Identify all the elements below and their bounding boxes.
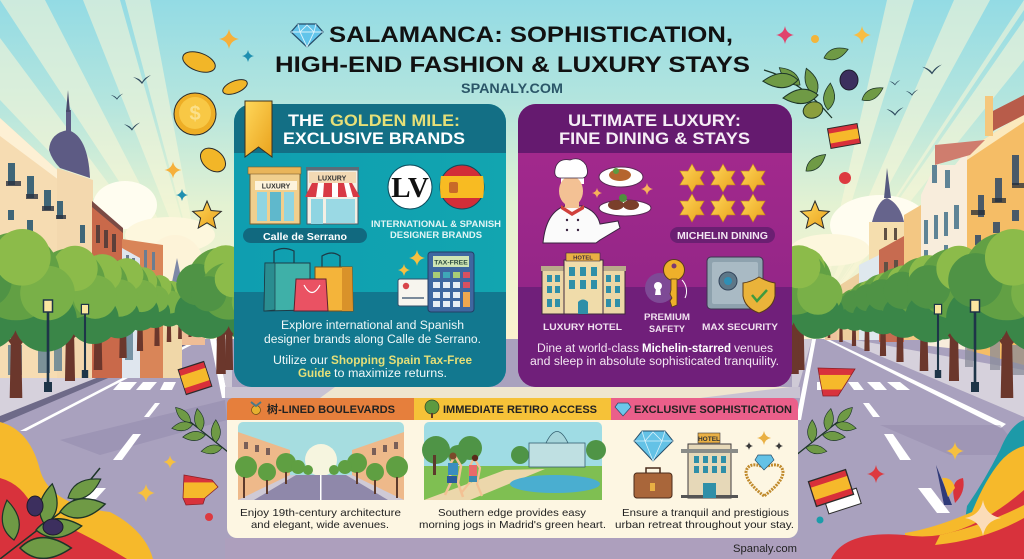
icon labels: LUXURY HOTEL [543, 322, 622, 333]
icons: sophistication set: HOTEL [698, 436, 720, 443]
icon: safe with shield [707, 257, 775, 313]
left buildings [0, 90, 205, 378]
trees beside panels [175, 245, 844, 374]
panel body text: venues [734, 343, 773, 355]
title: HIGH-END FASHION & LUXURY STAYS [275, 52, 750, 77]
panel body text [264, 320, 481, 380]
left lane dashes [85, 403, 160, 499]
icon labels: MAX SECURITY [702, 322, 779, 333]
icon: ribbon [245, 101, 272, 157]
icon: six michelin stars [680, 164, 765, 222]
panel body text: Shopping Spain Tax-Free [331, 355, 472, 367]
icon: luxury hotel [541, 253, 626, 314]
panel heading: FINE DINING & STAYS [559, 130, 750, 148]
panel heading: EXCLUSIVE BRANDS [283, 130, 465, 148]
panel body text: designer brands along Calle de Serrano. [264, 334, 481, 346]
header: retiro [414, 398, 611, 420]
header: sophistication: EXCLUSIVE SOPHISTICATION [634, 404, 792, 416]
icon: tax-free calculator and card [398, 250, 474, 312]
right crosswalk [817, 382, 910, 390]
panel heading [283, 112, 465, 148]
designer brands label [371, 219, 501, 241]
card captions [240, 507, 794, 531]
title [275, 22, 750, 96]
icon: lv logo [388, 165, 432, 209]
card captions: Ensure a tranquil and prestigious [622, 507, 789, 519]
street lamps [44, 300, 980, 392]
olive branch top right [763, 44, 886, 175]
flying coins [174, 48, 249, 177]
icon: tax-free calculator and card: TAX-FREE [434, 260, 468, 266]
panel body text: Guide [298, 368, 331, 380]
label: michelin dining [670, 227, 775, 243]
icon: lv logo: LV [391, 172, 429, 204]
header: boulevards: 树-LINED BOULEVARDS [267, 402, 395, 416]
right buildings [825, 95, 1024, 375]
card captions: Southern edge provides easy [438, 507, 587, 519]
header: sophistication [611, 398, 798, 420]
colour wave bottom right with fan [831, 420, 1024, 559]
icon labels: SAFETY [649, 324, 686, 335]
panel heading: THE [288, 112, 324, 130]
icon: luxury shops: LUXURY [262, 184, 291, 190]
left tree row [0, 229, 210, 398]
label: michelin dining: MICHELIN DINING [677, 231, 768, 242]
icon: luxury shops: LUXURY [318, 176, 347, 182]
card captions: urban retreat throughout your stay. [615, 519, 794, 531]
icon: chef with plates [543, 159, 653, 243]
background: sky with sun rays [0, 0, 1024, 345]
panel body text: and sleep in absolute sophisticated tranquility. [530, 356, 779, 368]
spanish flags [178, 124, 861, 517]
panel body text: Dine at world-class [537, 343, 639, 355]
label: calle de serrano [243, 228, 367, 243]
panel heading: GOLDEN MILE: [330, 112, 460, 130]
header: retiro: IMMEDIATE RETIRO ACCESS [443, 404, 597, 416]
left crosswalk [113, 382, 176, 390]
title: SALAMANCA: SOPHISTICATION, [329, 22, 733, 47]
scene: retiro park with joggers [422, 422, 606, 500]
right tree row [816, 229, 1024, 398]
road and pavements [0, 339, 1024, 559]
flying coins: $ [189, 103, 201, 125]
right lane dashes [863, 403, 950, 513]
designer brands label: DESIGNER BRANDS [390, 230, 482, 241]
icon labels [543, 312, 779, 335]
panel body text: Explore international and Spanish [281, 320, 464, 332]
card captions: Enjoy 19th-century architecture [240, 507, 401, 519]
title: SPANALY.COM [461, 81, 563, 96]
icon: spanish flag circle [440, 165, 484, 209]
icons: sophistication set [634, 431, 783, 498]
panel: ultimate luxury [518, 104, 792, 387]
spain map icons [183, 368, 855, 505]
olive branches low [171, 404, 857, 456]
birds [111, 64, 942, 131]
label: calle de serrano: Calle de Serrano [263, 231, 347, 243]
colour wave bottom left with olive branch [0, 422, 153, 559]
card captions: and elegant, wide avenues. [251, 519, 389, 531]
header: boulevards [227, 398, 414, 420]
stars and sparkles [137, 26, 964, 524]
icon: luxury hotel: HOTEL [573, 256, 593, 262]
panel body text: Michelin-starred [642, 343, 731, 355]
panel body text [530, 343, 779, 368]
panel heading: ULTIMATE LUXURY: [568, 112, 741, 130]
panel: the golden mile [234, 101, 506, 387]
scene: tree-lined boulevard [235, 422, 408, 500]
designer brands label: INTERNATIONAL & SPANISH [371, 219, 501, 230]
panel: bottom feature cards [227, 398, 798, 538]
panel body text: to maximize returns. [334, 368, 447, 380]
icon: diamond [291, 24, 323, 47]
icon: luxury shops [248, 167, 360, 224]
panel heading [559, 112, 750, 148]
card captions: morning jogs in Madrid's green heart. [419, 519, 606, 531]
panel body text: Utilize our [273, 355, 328, 367]
icon: shopping bags [264, 248, 353, 311]
footer credit: Spanaly.com [733, 543, 797, 555]
icon labels: PREMIUM [644, 312, 690, 323]
icon: key and lock [645, 260, 687, 307]
